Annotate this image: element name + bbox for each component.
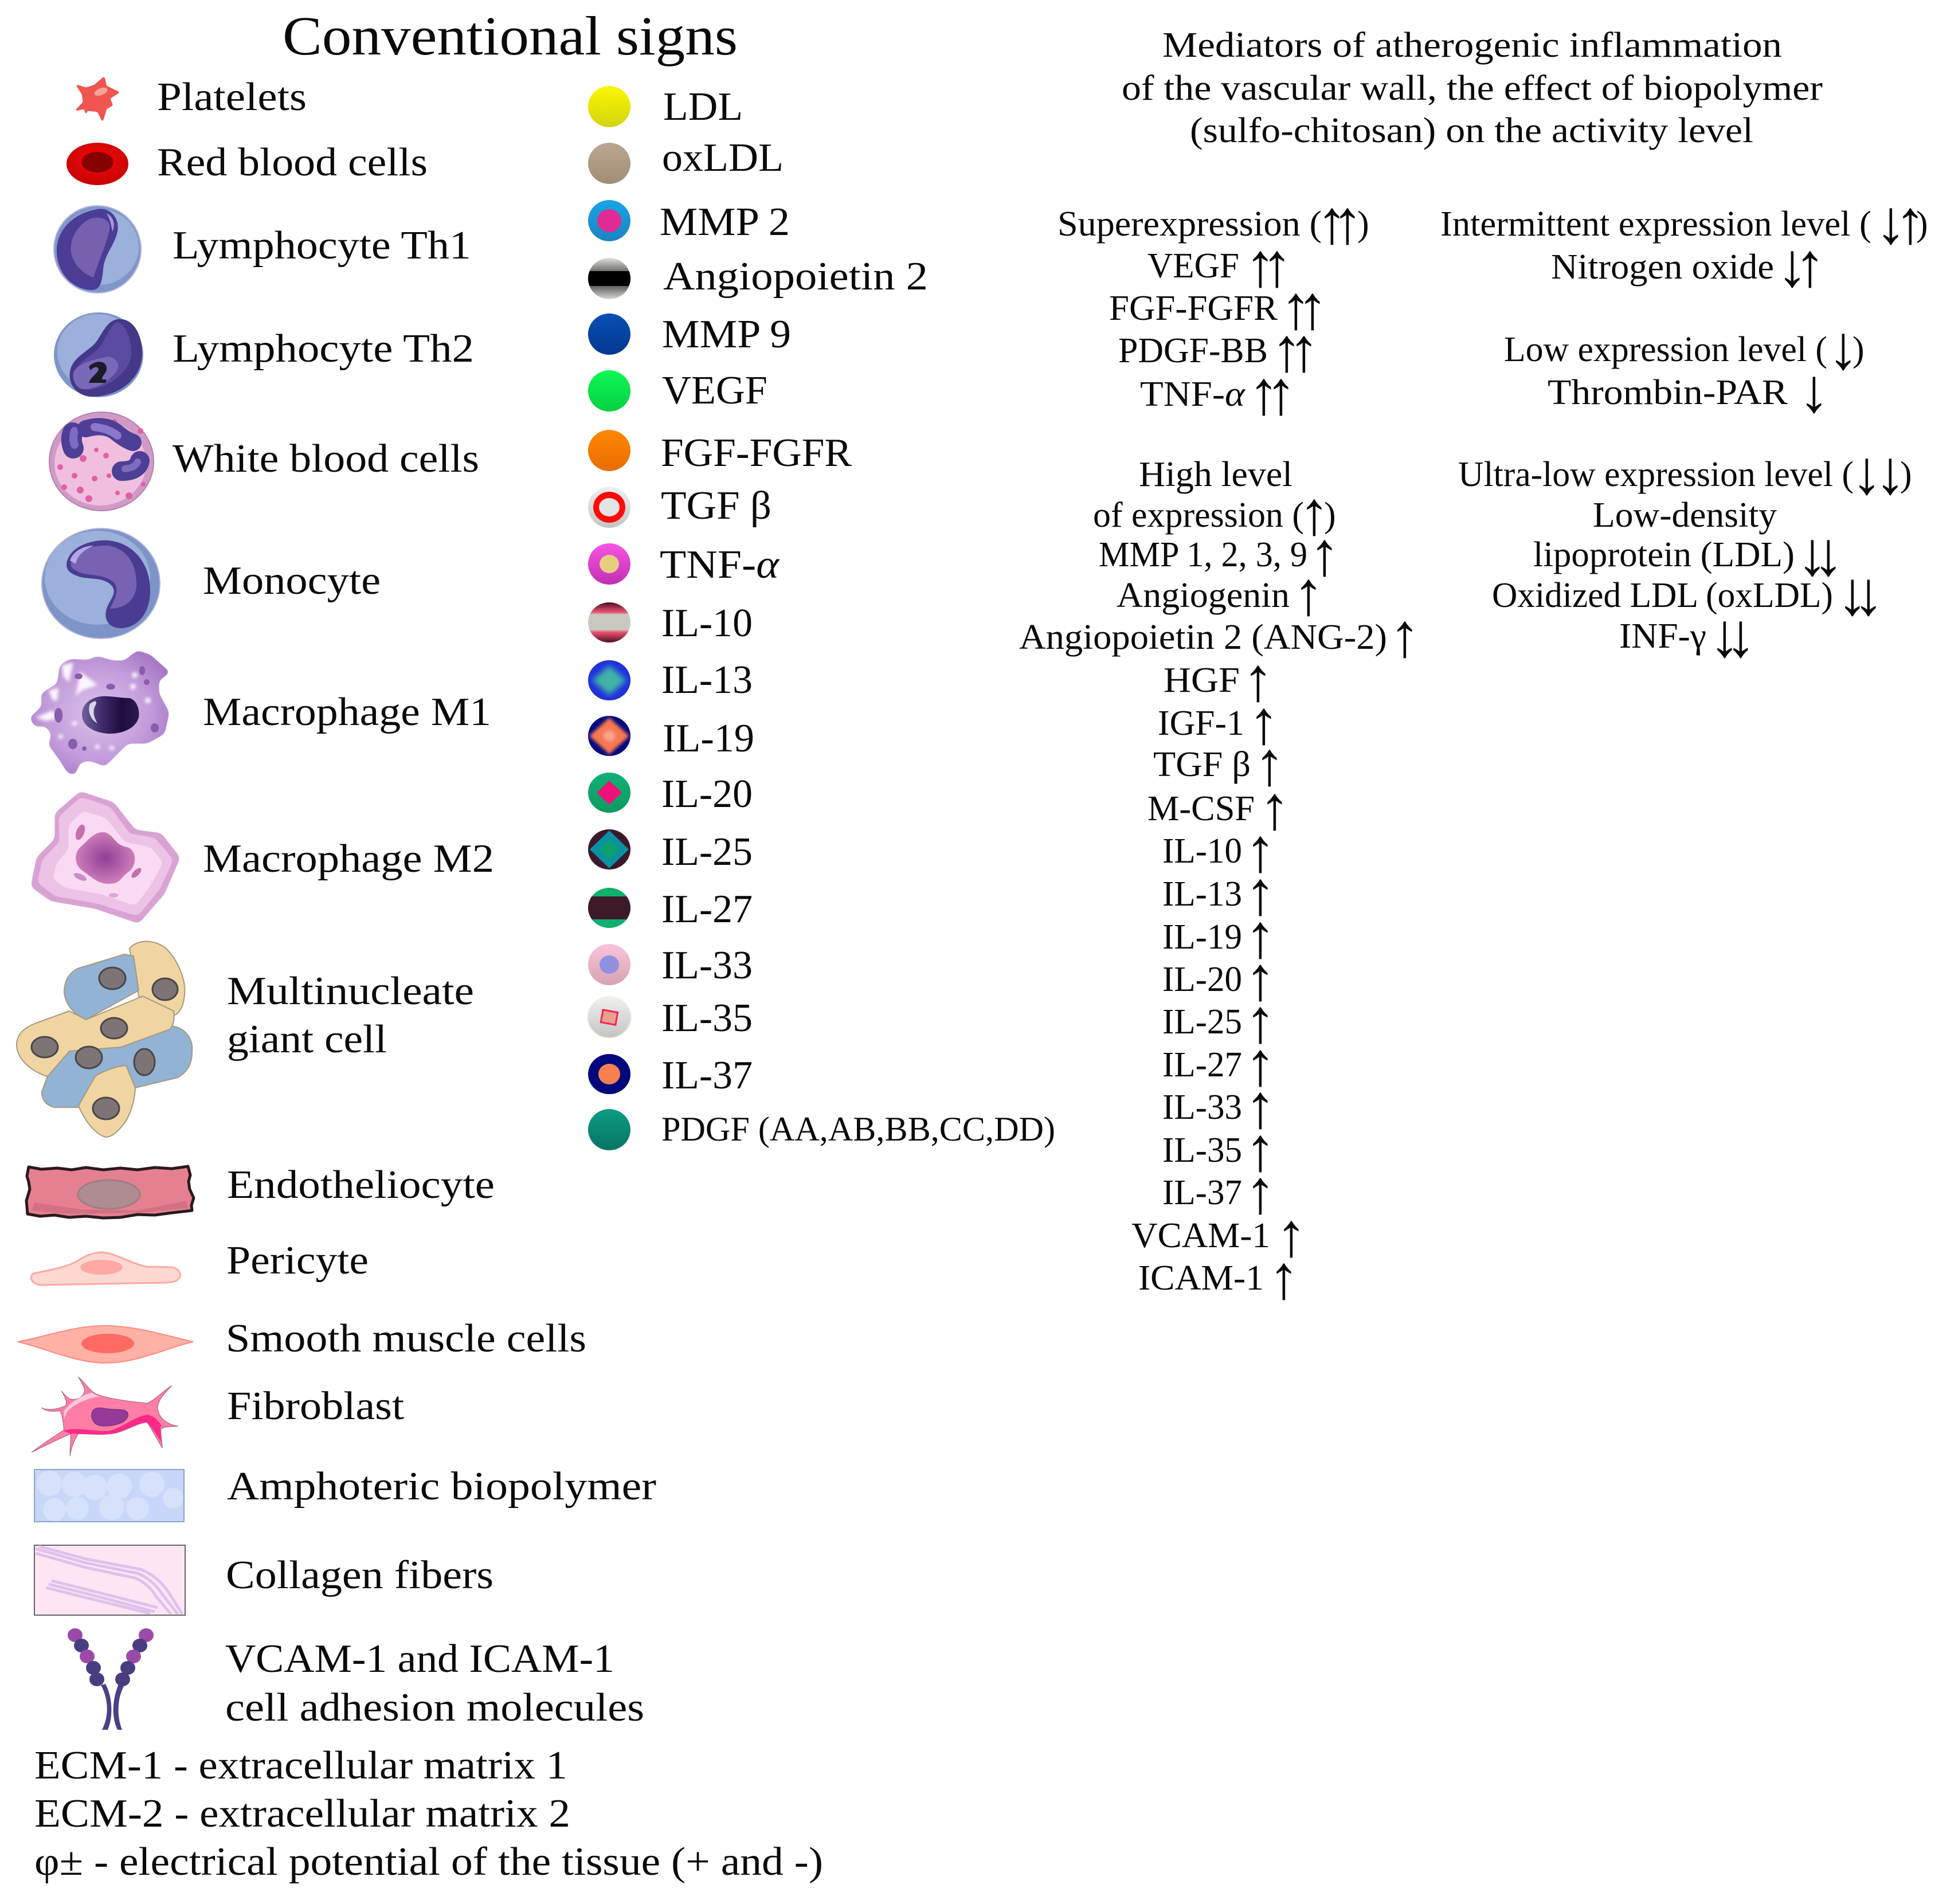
list: low expression bbox=[1504, 314, 1865, 425]
list: intermittent expression: ↓↑ bbox=[1875, 189, 1926, 257]
list: ultra-low expression: ↓↓ bbox=[1797, 520, 1844, 589]
label: IL-19: IL-19 bbox=[663, 716, 754, 761]
label: pericyte: Pericyte bbox=[226, 1239, 369, 1283]
label: TGF beta: TGF β bbox=[661, 484, 771, 528]
label: endotheliocyte: Endotheliocyte bbox=[227, 1163, 495, 1207]
list: high level of expression: ↑ bbox=[1248, 689, 1279, 757]
dot: FGF-FGFR bbox=[588, 430, 630, 471]
list: superexpression: ↑↑ bbox=[1245, 232, 1292, 300]
list: ultra-low expression: Low-density bbox=[1593, 496, 1777, 535]
list: low expression: ↓ bbox=[1828, 314, 1859, 382]
icon: endotheliocyte bbox=[26, 1166, 194, 1218]
list: high level of expression: IL-19 bbox=[1162, 918, 1242, 957]
list: intermittent expression: Nitrogen oxide bbox=[1551, 248, 1774, 287]
list: high level of expression: M-CSF bbox=[1147, 789, 1255, 828]
label: platelets: Platelets bbox=[157, 75, 307, 119]
list: high level of expression: ↑ bbox=[1245, 945, 1276, 1013]
dot: IL-27 bbox=[586, 888, 632, 928]
label: IL-10: IL-10 bbox=[661, 601, 753, 645]
label: oxLDL: oxLDL bbox=[662, 136, 784, 180]
list: low expression: Low expression level ( bbox=[1504, 330, 1827, 369]
list: high level of expression: of expression ( bbox=[1093, 496, 1304, 535]
icon: smooth muscle cell bbox=[18, 1326, 193, 1363]
label: IL-20: IL-20 bbox=[661, 772, 753, 816]
label: lymphocyte Th2: Lymphocyte Th2 bbox=[173, 327, 474, 371]
label: VEGF: VEGF bbox=[662, 369, 767, 413]
list: low expression: ↓ bbox=[1799, 357, 1830, 425]
label: TNF-alpha: TNF-α bbox=[660, 543, 780, 587]
list: high level of expression: IL-37 bbox=[1162, 1173, 1242, 1212]
list: ultra-low expression: ↓↓ bbox=[1837, 560, 1884, 628]
dot: IL-35 bbox=[587, 997, 631, 1038]
list: high level of expression: ↑ bbox=[1245, 1073, 1276, 1141]
list: intermittent expression: ) bbox=[1916, 205, 1928, 244]
dot: Angiopoietin 2 bbox=[586, 258, 632, 299]
list: high level of expression: IL-10 bbox=[1162, 832, 1242, 871]
label: FGF-FGFR: FGF-FGFR bbox=[661, 431, 852, 475]
list: ultra-low expression: Oxidized LDL (oxLDL) bbox=[1492, 576, 1833, 615]
label: white blood cells: White blood cells bbox=[173, 437, 479, 481]
list: high level of expression: ↑ bbox=[1243, 646, 1274, 714]
list: high level of expression: ↑ bbox=[1245, 988, 1276, 1056]
dot: MMP 9 bbox=[588, 314, 630, 355]
list: high level of expression: ↑ bbox=[1245, 903, 1276, 971]
label: macrophage M2: Macrophage M2 bbox=[203, 837, 494, 881]
dot: IL-20 bbox=[588, 773, 630, 813]
list: high level of expression: ↑ bbox=[1309, 520, 1340, 589]
list: high level of expression: ↑ bbox=[1276, 1201, 1307, 1270]
list: superexpression: ) bbox=[1357, 205, 1369, 244]
list: high level of expression: ↑ bbox=[1293, 560, 1324, 628]
list: high level of expression: Angiogenin bbox=[1117, 576, 1290, 615]
heading: mediators: of the vascular wall, the effect of biopolymer bbox=[1122, 69, 1823, 108]
panel: mediator legend bbox=[586, 85, 1055, 1150]
icon: collagen fibers bbox=[34, 1545, 185, 1615]
dot: IL-19 bbox=[588, 716, 630, 756]
list: high level of expression bbox=[1019, 455, 1420, 1312]
list: ultra-low expression: INF-γ bbox=[1619, 617, 1706, 656]
label: PDGF: PDGF (AA,AB,BB,CC,DD) bbox=[661, 1110, 1055, 1148]
label: IL-25: IL-25 bbox=[661, 830, 753, 874]
panel: cell legend bbox=[17, 75, 656, 1730]
list: high level of expression: ICAM-1 bbox=[1138, 1259, 1264, 1298]
label: monocyte: Monocyte bbox=[203, 559, 381, 603]
list: superexpression: PDGF-BB bbox=[1118, 331, 1268, 370]
icon: lymphocyte Th1 bbox=[54, 206, 141, 293]
icon: adhesion molecules bbox=[68, 1628, 154, 1730]
dot: MMP 2 bbox=[588, 200, 630, 241]
list: superexpression: ↑↑ bbox=[1317, 189, 1363, 257]
list: high level of expression: Angiopoietin 2 (ANG-2) bbox=[1019, 618, 1387, 657]
list: high level of expression: ) bbox=[1324, 496, 1336, 535]
label: multinucleate giant cell: giant cell bbox=[227, 1017, 387, 1061]
label: IL-35: IL-35 bbox=[661, 996, 753, 1040]
list: ultra-low expression: lipoprotein (LDL) bbox=[1533, 535, 1795, 574]
label: lymphocyte Th1: Lymphocyte Th1 bbox=[173, 224, 471, 268]
heading: mediators bbox=[1122, 26, 1823, 150]
label: Angiopoietin 2: Angiopoietin 2 bbox=[663, 254, 928, 299]
icon: macrophage M2 bbox=[31, 792, 180, 923]
label: multinucleate giant cell: Multinucleate bbox=[227, 969, 474, 1013]
dot: oxLDL bbox=[588, 143, 630, 184]
list: high level of expression: IL-25 bbox=[1162, 1002, 1242, 1041]
list: high level of expression: High level bbox=[1139, 455, 1292, 494]
notes: abbreviations: ECM-1 - extracellular matrix 1 bbox=[34, 1744, 567, 1788]
label: amphoteric biopolymer: Amphoteric biopolymer bbox=[227, 1464, 656, 1509]
label: collagen fibers: Collagen fibers bbox=[226, 1553, 493, 1597]
list: intermittent expression: Intermittent expression level ( bbox=[1440, 205, 1871, 244]
list: ultra-low expression: ↓↓ bbox=[1851, 439, 1906, 507]
list: high level of expression: VCAM-1 bbox=[1131, 1216, 1270, 1255]
notes: abbreviations: ECM-2 - extracellular matrix 2 bbox=[34, 1792, 570, 1836]
list: superexpression: Superexpression ( bbox=[1057, 205, 1322, 244]
list: high level of expression: IL-27 bbox=[1162, 1045, 1242, 1084]
list: high level of expression: ↑ bbox=[1245, 1031, 1276, 1099]
list: high level of expression: ↑ bbox=[1245, 860, 1276, 928]
dot: IL-13 bbox=[588, 660, 630, 700]
label: IL-13: IL-13 bbox=[661, 658, 753, 702]
list: superexpression: VEGF bbox=[1147, 246, 1239, 285]
list: high level of expression: IGF-1 bbox=[1158, 704, 1244, 743]
label: IL-33: IL-33 bbox=[661, 943, 753, 988]
list: superexpression: FGF-FGFR bbox=[1109, 289, 1278, 328]
icon: monocyte bbox=[42, 528, 160, 638]
dot: TNF-alpha bbox=[588, 543, 630, 585]
list: superexpression: ↑↑ bbox=[1271, 316, 1319, 385]
icon: lymphocyte Th2 bbox=[54, 312, 143, 397]
list: high level of expression: ↑ bbox=[1245, 1158, 1276, 1227]
dot: IL-25 bbox=[588, 829, 630, 869]
label: MMP 2: MMP 2 bbox=[660, 200, 790, 244]
icon: platelets bbox=[75, 76, 120, 122]
list: high level of expression: ↑ bbox=[1268, 1244, 1299, 1312]
icon: macrophage M1 bbox=[30, 651, 170, 775]
dot: PDGF bbox=[588, 1109, 630, 1150]
list: high level of expression: IL-20 bbox=[1162, 960, 1242, 999]
list: high level of expression: IL-33 bbox=[1162, 1088, 1242, 1127]
list: high level of expression: ↑ bbox=[1254, 730, 1285, 798]
list: high level of expression: ↑ bbox=[1245, 1116, 1276, 1184]
list: high level of expression: ↑ bbox=[1245, 817, 1276, 885]
dot: TGF beta bbox=[588, 487, 630, 528]
heading: mediators: Mediators of atherogenic inflammation bbox=[1162, 26, 1782, 65]
label: red blood cells: Red blood cells bbox=[157, 140, 428, 185]
label: multinucleate giant cell bbox=[227, 969, 474, 1061]
list: intermittent expression: ↓↑ bbox=[1777, 232, 1826, 300]
list: high level of expression: IL-13 bbox=[1162, 875, 1242, 914]
title: Conventional signs bbox=[283, 5, 738, 66]
list: high level of expression: ↑ bbox=[1389, 602, 1420, 670]
dot: IL-10 bbox=[588, 602, 630, 642]
icon: fibroblast bbox=[32, 1377, 178, 1456]
label: adhesion molecules: VCAM-1 and ICAM-1 bbox=[225, 1637, 614, 1681]
list: high level of expression: MMP 1, 2, 3, 9 bbox=[1099, 535, 1307, 574]
icon: red blood cell bbox=[66, 143, 128, 185]
list: ultra-low expression: ) bbox=[1900, 455, 1912, 494]
list: high level of expression: TGF β bbox=[1153, 745, 1251, 784]
icon: white blood cell bbox=[49, 412, 154, 511]
label: MMP 9: MMP 9 bbox=[662, 312, 791, 356]
label: IL-37: IL-37 bbox=[661, 1053, 753, 1098]
heading: mediators: (sulfo-chitosan) on the activity level bbox=[1190, 111, 1753, 150]
list: intermittent expression bbox=[1440, 189, 1928, 300]
list: superexpression: TNF-α bbox=[1140, 375, 1246, 414]
list: high level of expression: HGF bbox=[1164, 661, 1240, 700]
list: superexpression bbox=[1057, 189, 1369, 428]
label: LDL: LDL bbox=[663, 85, 743, 129]
notes: abbreviations: φ± - electrical potential of the tissue (+ and -) bbox=[34, 1840, 823, 1884]
list: ultra-low expression: ↓↓ bbox=[1709, 602, 1756, 670]
list: superexpression: ↑↑ bbox=[1280, 274, 1328, 342]
icon: multinucleate giant cell bbox=[17, 941, 192, 1137]
notes: abbreviations bbox=[34, 1744, 823, 1884]
list: high level of expression: ↑ bbox=[1299, 480, 1330, 548]
list: high level of expression: ↑ bbox=[1259, 774, 1290, 843]
label: macrophage M1: Macrophage M1 bbox=[203, 690, 491, 734]
label: IL-27: IL-27 bbox=[661, 887, 753, 931]
label: adhesion molecules: cell adhesion molecules bbox=[225, 1686, 644, 1730]
list: ultra-low expression: Ultra-low expression level ( bbox=[1458, 455, 1854, 494]
label: smooth muscle cells: Smooth muscle cells bbox=[226, 1317, 586, 1361]
icon: pericyte bbox=[31, 1252, 180, 1285]
dot: IL-37 bbox=[588, 1054, 630, 1094]
dot: LDL bbox=[588, 86, 630, 127]
list: ultra-low expression bbox=[1458, 439, 1912, 670]
dot: IL-33 bbox=[588, 944, 630, 985]
label: adhesion molecules bbox=[225, 1637, 644, 1730]
list: low expression: Thrombin-PAR bbox=[1548, 373, 1788, 412]
label: fibroblast: Fibroblast bbox=[227, 1384, 405, 1428]
list: low expression: ) bbox=[1852, 330, 1865, 369]
list: superexpression: ↑↑ bbox=[1248, 359, 1296, 428]
dot: VEGF bbox=[588, 370, 630, 412]
icon: amphoteric biopolymer bbox=[34, 1470, 184, 1522]
list: high level of expression: IL-35 bbox=[1162, 1131, 1242, 1170]
